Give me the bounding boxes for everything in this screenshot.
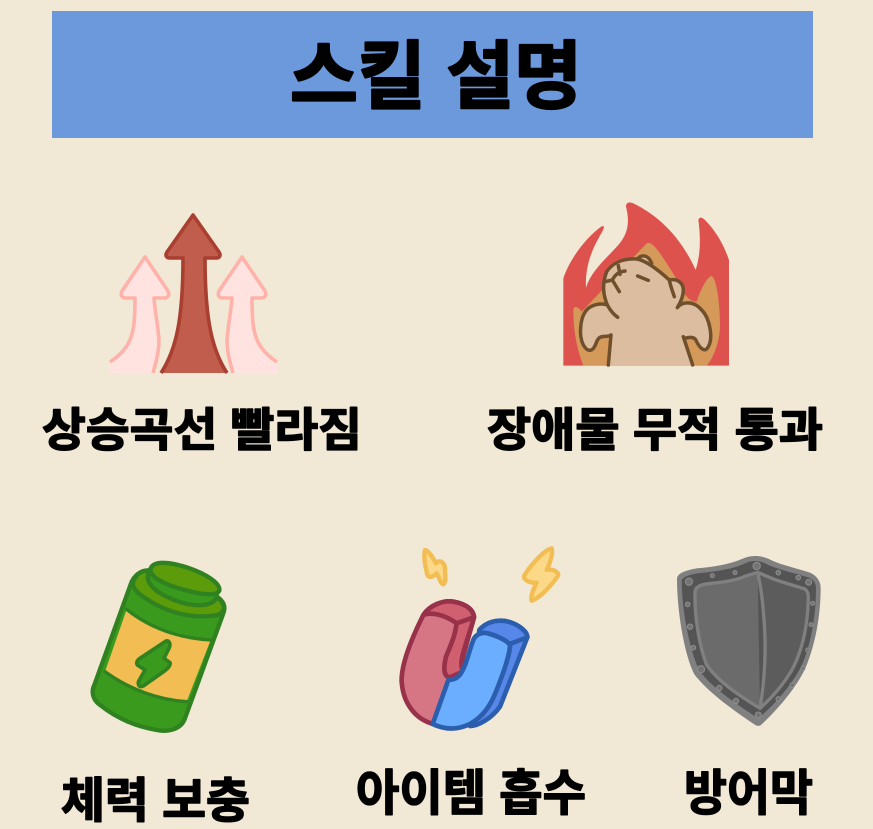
- icon: magnet with sparks: [402, 548, 558, 728]
- icon: shield: [677, 556, 821, 726]
- icon: capybara in flames: [563, 202, 729, 366]
- label: rising curve: 상승곡선 빨라짐: [42, 404, 362, 456]
- icon: rising arrows: [110, 215, 277, 373]
- title banner: [52, 11, 813, 138]
- label: item absorb: 아이템 흡수: [356, 767, 586, 821]
- title: 스킬 설명: [290, 35, 582, 118]
- label: health refill: 체력 보충: [61, 775, 250, 828]
- icon: energy battery can: [93, 563, 224, 731]
- label: obstacle invincible pass: 장애물 무적 통과: [487, 404, 823, 456]
- label: shield: 방어막: [684, 767, 813, 821]
